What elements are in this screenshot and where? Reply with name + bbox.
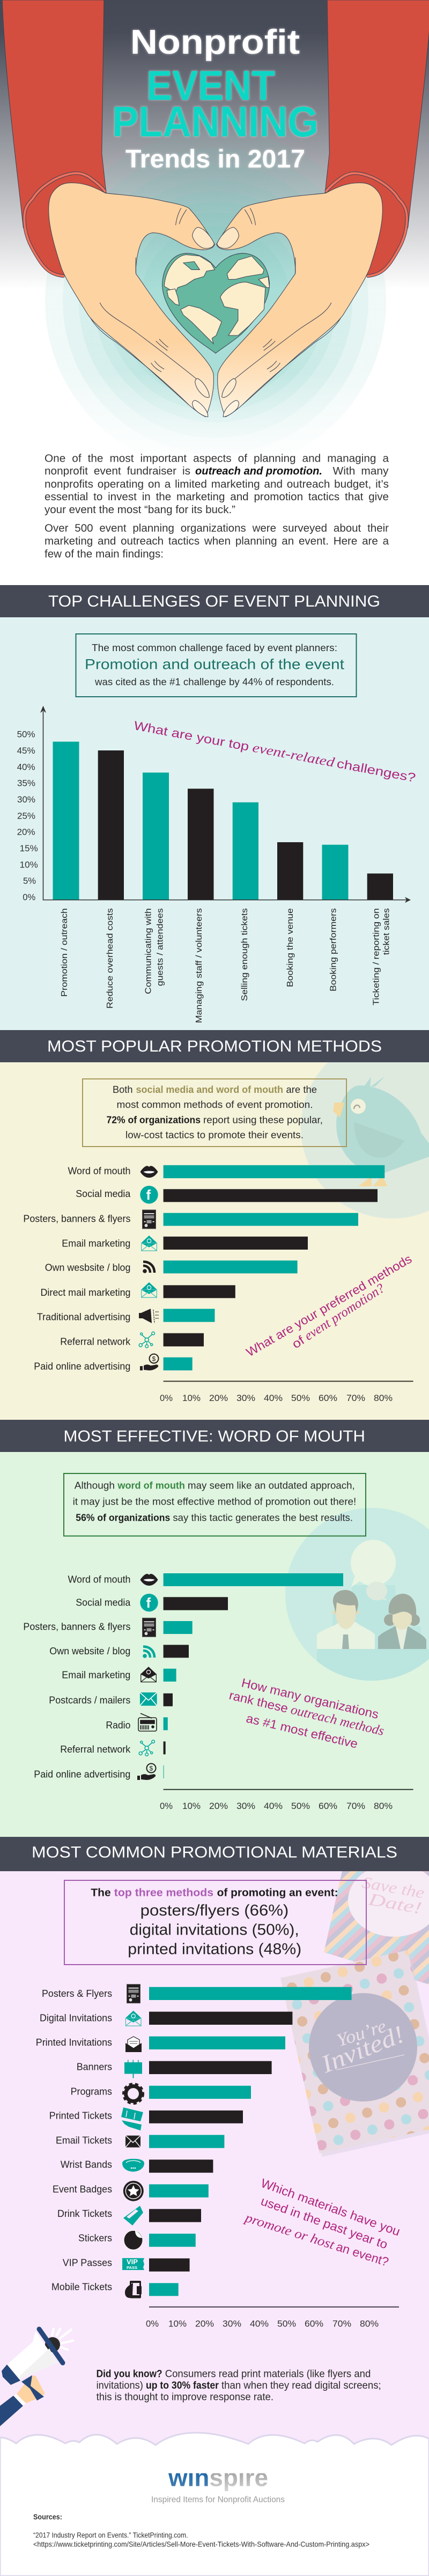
- question callout: [132, 718, 417, 785]
- callout box: 72% of organizations: [106, 1114, 201, 1125]
- concentric ripple rings: [45, 130, 386, 472]
- icon: facebook: f: [146, 1595, 151, 1611]
- x axis labels: 50%: [277, 2319, 296, 2329]
- x axis labels: 0%: [160, 1801, 173, 1811]
- sources: [33, 2512, 369, 2548]
- you're invited card: [280, 1950, 429, 2157]
- x axis labels: 40%: [250, 2319, 269, 2329]
- row labels: [23, 1165, 131, 1372]
- heading band: MOST COMMON PROMOTIONAL MATERIALS: [32, 1844, 397, 1862]
- row labels: Posters, banners & flyers: [23, 1621, 130, 1632]
- icon: vip pass: [122, 2258, 144, 2270]
- intro text: nonprofit event fundraiser is: [45, 465, 190, 477]
- question callout: an event?: [335, 2239, 390, 2269]
- winspire logo: [151, 2464, 285, 2505]
- heading band: [0, 585, 429, 617]
- x axis line: [164, 1789, 413, 1790]
- bars: [53, 742, 393, 900]
- callout box: are the: [286, 1084, 317, 1095]
- row labels: Email marketing: [62, 1669, 130, 1681]
- category labels: Booking performers: [329, 908, 338, 991]
- x axis labels: 70%: [346, 1393, 365, 1403]
- callout box: word of mouth: [117, 1479, 185, 1491]
- main title: Trends in 2017: [125, 144, 305, 173]
- did you know text: [97, 2368, 381, 2403]
- callout box: The: [91, 1887, 111, 1899]
- row labels: Traditional advertising: [37, 1311, 130, 1322]
- x axis labels: 0%: [146, 2319, 159, 2329]
- section: most effective: [0, 1420, 429, 1837]
- heading band: MOST POPULAR PROMOTION METHODS: [47, 1038, 382, 1055]
- question callout: [228, 1675, 386, 1751]
- hands, sleeves and earth heart: [2, 0, 429, 417]
- question callout: event-related: [252, 740, 336, 770]
- left arm and hand: [2, 0, 215, 417]
- y axis labels: [17, 730, 38, 902]
- row labels: Referral network: [60, 1743, 131, 1755]
- icon: sticker: [124, 2230, 143, 2250]
- icon: vip pass: VIP: [127, 2258, 138, 2266]
- callout box: [64, 1880, 366, 1965]
- did you know text: this is thought to improve response rate.: [97, 2391, 273, 2403]
- x axis labels: 70%: [346, 1801, 365, 1811]
- intro text: [45, 453, 389, 560]
- row labels: Word of mouth: [68, 1165, 131, 1176]
- row labels: Event Badges: [53, 2183, 112, 2194]
- callout box: it may just be the most effective method of promotion out there!: [73, 1495, 356, 1507]
- heading band: [0, 1030, 429, 1062]
- section: promotional materials: [0, 1837, 429, 2446]
- row labels: Direct mail marketing: [41, 1287, 131, 1298]
- x axis labels: 30%: [223, 2319, 241, 2329]
- icon: lips: [140, 1574, 158, 1586]
- question callout: outreach methods: [289, 1703, 386, 1739]
- section background: [0, 1452, 429, 1837]
- row labels: Posters & Flyers: [42, 1988, 112, 1999]
- row labels: Drink Tickets: [57, 2208, 112, 2219]
- category labels: Booking the venue: [286, 908, 295, 987]
- earth heart: [162, 253, 270, 353]
- save the date card: Save the: [361, 1873, 426, 1902]
- bars: [164, 1573, 343, 1778]
- icon: event badge: [123, 2181, 144, 2201]
- icon: programs gear: [123, 2084, 143, 2103]
- icon: megaphone: [139, 1309, 159, 1323]
- row labels: Social media: [76, 1188, 131, 1199]
- row labels: VIP Passes: [63, 2257, 112, 2268]
- icon: rss: [143, 1647, 154, 1658]
- heading band: [0, 1837, 429, 1871]
- did you know text: invitations): [97, 2380, 143, 2391]
- x axis labels: 40%: [264, 1801, 283, 1811]
- icon: printed tickets: [121, 2107, 143, 2130]
- y axis labels: 25%: [17, 811, 35, 821]
- callout box: Both: [113, 1084, 133, 1095]
- row labels: Email Tickets: [56, 2134, 112, 2146]
- row labels: Digital Invitations: [40, 2012, 112, 2024]
- y axis labels: 5%: [23, 877, 36, 886]
- x axis labels: 50%: [291, 1801, 310, 1811]
- callout box: top three methods: [114, 1887, 213, 1899]
- right arm and hand (mirror): [217, 0, 429, 417]
- callout box: report using these popular,: [203, 1114, 323, 1125]
- question callout: What are your preferred methods: [243, 1252, 414, 1359]
- icon: facebook: f: [146, 1187, 151, 1203]
- callout box: 56% of organizations: [76, 1512, 170, 1523]
- question callout: Which materials have you: [259, 2176, 402, 2238]
- question callout: What are your top: [133, 718, 250, 754]
- y axis labels: 20%: [17, 828, 35, 837]
- x axis line: [149, 2307, 399, 2308]
- row labels: Email marketing: [62, 1237, 130, 1249]
- x axis labels: 30%: [236, 1393, 255, 1403]
- did you know text: Consumers read print materials (like flyers and: [165, 2368, 371, 2380]
- x axis labels: 60%: [305, 2319, 323, 2329]
- row labels: Printed Invitations: [36, 2037, 112, 2048]
- intro text: nonprofits operating on a limited marketing and outreach budget, it’s: [45, 478, 389, 490]
- x axis labels: [160, 1801, 393, 1811]
- cloud edge: [0, 2433, 429, 2576]
- question callout: promote or host: [242, 2210, 337, 2252]
- question callout: How many organizations: [240, 1675, 380, 1721]
- row labels: Banners: [77, 2061, 112, 2073]
- main title: EVENT: [146, 62, 275, 109]
- callout box: posters/flyers (66%): [140, 1902, 289, 1919]
- horizontal bar chart: [23, 1573, 413, 1811]
- y axis labels: 10%: [20, 860, 38, 870]
- x axis labels: [146, 2319, 379, 2329]
- row labels: Printed Tickets: [49, 2110, 112, 2121]
- callout box: may seem like an outdated approach,: [188, 1479, 355, 1491]
- x axis labels: 20%: [195, 2319, 214, 2329]
- icon: paid advertising: [137, 1764, 156, 1780]
- winspire logo: winspire: [168, 2464, 268, 2492]
- save the date card: Date!: [366, 1889, 424, 1917]
- heading band: TOP CHALLENGES OF EVENT PLANNING: [48, 593, 380, 610]
- y axis labels: 15%: [20, 844, 38, 853]
- category labels: Managing staff / volunteers: [195, 908, 204, 1023]
- main title: Nonprofit: [130, 23, 300, 61]
- callout box: low-cost tactics to promote their events.: [125, 1129, 304, 1140]
- row labels: Word of mouth: [68, 1573, 131, 1585]
- icon: wrist band: [122, 2159, 144, 2172]
- icon: radio: [138, 1713, 157, 1731]
- icon: rss: [143, 1261, 154, 1273]
- callout box: printed invitations (48%): [128, 1941, 301, 1958]
- row labels: Own wesbsite / blog: [45, 1261, 130, 1273]
- callout box: most common methods of event promotion.: [117, 1099, 313, 1110]
- icon: email: [141, 1236, 157, 1251]
- x axis labels: 70%: [332, 2319, 351, 2329]
- callout box: [64, 1473, 366, 1536]
- icon: postcard: [140, 1692, 157, 1706]
- icon: facebook: [140, 1186, 158, 1203]
- icon: poster: [127, 1984, 140, 2003]
- intro text: essential to invest in the marketing and promotion tactics that give: [45, 491, 389, 503]
- y axis labels: 35%: [17, 778, 35, 788]
- icon: poster: [143, 1618, 156, 1637]
- callout box: was cited as the #1 challenge by 44% of respondents.: [94, 676, 334, 687]
- question callout: of: [290, 1333, 307, 1351]
- question callout: event promotion?: [302, 1281, 387, 1344]
- callout box: social media and word of mouth: [136, 1084, 283, 1095]
- did you know text: than when they read digital screens;: [221, 2380, 381, 2391]
- people illustration: [285, 1508, 429, 1681]
- y axis labels: 50%: [17, 730, 35, 740]
- y axis labels: 40%: [17, 762, 35, 772]
- icon: referral network: [139, 1332, 154, 1348]
- row labels: Posters, banners & flyers: [23, 1213, 130, 1224]
- row labels: Referral network: [60, 1336, 131, 1347]
- section background: [0, 617, 429, 1030]
- row labels: Postcards / mailers: [49, 1694, 130, 1705]
- category labels: Ticketing / reporting on: [372, 908, 381, 1005]
- x axis labels: 60%: [319, 1801, 337, 1811]
- tagline: Inspired Items for Nonprofit Auctions: [151, 2495, 285, 2505]
- x axis labels: 30%: [236, 1801, 255, 1811]
- bars: [149, 1987, 352, 2296]
- callout box: of promoting an event:: [217, 1887, 338, 1899]
- section: popular promotion methods: [0, 1030, 429, 1420]
- question callout: [242, 2176, 402, 2269]
- x axis labels: 80%: [374, 1393, 393, 1403]
- category labels: Reduce overhead costs: [106, 908, 115, 1009]
- row labels: Paid online advertising: [34, 1361, 130, 1372]
- row labels: Programs: [71, 2086, 112, 2097]
- intro text: One of the most important aspects of planning and managing a: [45, 453, 389, 465]
- sources: “2017 Industry Report on Events.” TicketPrinting.com.: [33, 2530, 188, 2539]
- callout box: [76, 634, 356, 697]
- did you know text: up to 30% faster: [146, 2380, 219, 2391]
- category labels: ticket sales: [382, 908, 391, 955]
- icon: facebook: [140, 1594, 158, 1611]
- row labels: Wrist Bands: [61, 2159, 112, 2170]
- callout box: Although: [75, 1479, 115, 1491]
- sources: Sources:: [33, 2512, 62, 2521]
- icon: poster: [143, 1210, 156, 1229]
- callout box: digital invitations (50%),: [130, 1921, 299, 1938]
- category labels: Promotion / outreach: [60, 908, 69, 997]
- icon: direct mail: [141, 1282, 157, 1297]
- y axis labels: 0%: [23, 893, 36, 902]
- x axis labels: 20%: [209, 1801, 228, 1811]
- row labels: Own website / blog: [49, 1645, 130, 1656]
- question callout: as #1 most effective: [245, 1711, 359, 1751]
- column chart: [17, 706, 411, 1023]
- icon: email: [140, 1667, 157, 1682]
- hero sky gradient: [0, 0, 429, 290]
- icon: digital invitation: [125, 2011, 142, 2026]
- row labels: Paid online advertising: [34, 1769, 130, 1780]
- you're invited card: Invited!: [317, 2020, 408, 2078]
- icon: megaphone and hand: [0, 2328, 74, 2426]
- icon: paid advertising: [140, 1354, 159, 1370]
- bars: [164, 1165, 384, 1370]
- x axis labels: 80%: [374, 1801, 393, 1811]
- icon: referral network: [139, 1740, 154, 1756]
- x axis labels: 10%: [168, 2319, 187, 2329]
- icon: drink ticket: [123, 2206, 143, 2225]
- main title: PLANNING: [112, 98, 319, 145]
- bird illustration: [301, 1062, 429, 1218]
- intro text: outreach and promotion.: [195, 465, 322, 477]
- callout box: say this tactic generates the best results.: [173, 1512, 353, 1523]
- intro text: Over 500 event planning organizations were surveyed about their: [45, 523, 389, 535]
- row labels: Mobile Tickets: [51, 2281, 112, 2293]
- callout box: Promotion and outreach of the event: [85, 656, 345, 673]
- question callout: rank these: [228, 1688, 290, 1716]
- x axis labels: 60%: [319, 1393, 337, 1403]
- sources: <https://www.ticketprinting.com/Site/Articles/Sell-More-Event-Tickets-With-Software-And-Custom-Printing.aspx>: [33, 2539, 369, 2548]
- did you know text: Did you know?: [97, 2368, 162, 2380]
- section background: [0, 1062, 429, 1420]
- category labels: guests / attendees: [156, 908, 165, 986]
- row labels: [23, 1573, 131, 1780]
- category labels: [60, 908, 391, 1023]
- icon: mobile tickets: [125, 2281, 142, 2298]
- x axis labels: 80%: [360, 2319, 379, 2329]
- x axis line: [164, 1381, 413, 1382]
- row labels: Social media: [76, 1597, 131, 1608]
- icon: vip pass: PASS: [127, 2265, 137, 2270]
- intro text: your event the most “bang for its buck.”: [45, 504, 235, 516]
- intro text: With many: [332, 465, 388, 477]
- intro text: few of the main findings:: [45, 548, 164, 560]
- icon: email tickets: [125, 2135, 140, 2147]
- icon: banner: [124, 2060, 142, 2078]
- row labels: [36, 1988, 112, 2293]
- x axis labels: 40%: [264, 1393, 283, 1403]
- x axis labels: [160, 1393, 393, 1403]
- hero illustration: [0, 0, 429, 472]
- icon: lips: [140, 1166, 158, 1178]
- horizontal bar chart: [23, 1165, 413, 1403]
- section: top challenges: [0, 585, 429, 1030]
- y axis labels: 45%: [17, 746, 35, 756]
- callout box: The most common challenge faced by event planners:: [92, 642, 337, 653]
- main title: [112, 23, 319, 173]
- callout box: [83, 1079, 346, 1147]
- heading band: MOST EFFECTIVE: WORD OF MOUTH: [63, 1428, 365, 1446]
- x axis labels: 50%: [291, 1393, 310, 1403]
- horizontal bar chart: [36, 1984, 399, 2329]
- row labels: Radio: [106, 1719, 130, 1731]
- icon: printed invitation: [125, 2037, 142, 2052]
- x axis labels: 10%: [182, 1801, 201, 1811]
- you're invited card: You’re: [334, 2016, 389, 2051]
- heading band: [0, 1420, 429, 1452]
- category labels: Selling enough tickets: [240, 908, 249, 1001]
- section background: [0, 1871, 429, 2446]
- question callout: used in the past year to: [259, 2194, 389, 2252]
- x axis labels: 0%: [160, 1393, 173, 1403]
- x axis labels: 20%: [209, 1393, 228, 1403]
- axes with arrows: [40, 706, 411, 903]
- row labels: Stickers: [78, 2232, 112, 2244]
- category labels: Communicating with: [144, 908, 153, 994]
- question callout: challenges?: [336, 756, 417, 785]
- intro text: marketing and outreach tactics when planning an event. Here are a: [45, 536, 389, 548]
- x axis labels: 10%: [182, 1393, 201, 1403]
- save the date card: [324, 1864, 429, 1984]
- y axis labels: 30%: [17, 795, 35, 805]
